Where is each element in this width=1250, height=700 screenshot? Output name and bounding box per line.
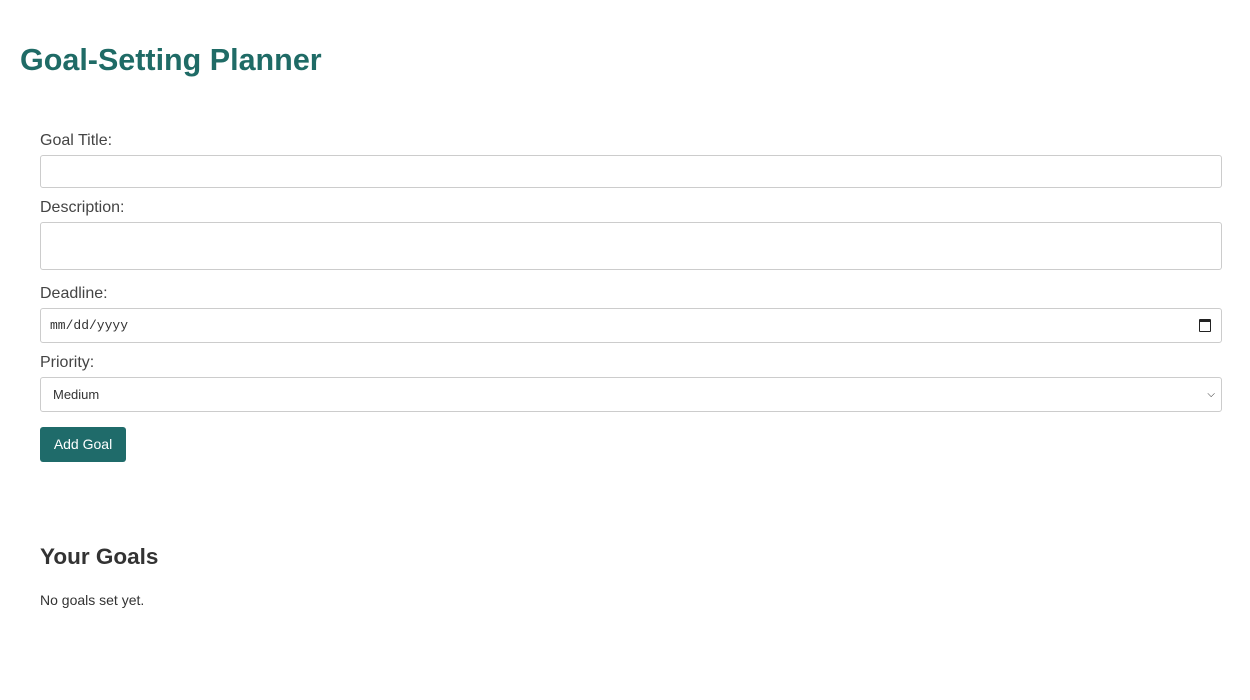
textarea: description bbox=[40, 222, 1222, 270]
title: Goal-Setting Planner bbox=[20, 43, 322, 77]
select: priority bbox=[40, 377, 1222, 412]
label: description: Description: bbox=[40, 199, 124, 216]
button: add goal: Add Goal bbox=[54, 436, 112, 452]
input: deadline date bbox=[40, 308, 1222, 343]
input: goal title bbox=[40, 155, 1222, 188]
label: goal title: Goal Title: bbox=[40, 132, 112, 149]
label: deadline: Deadline: bbox=[40, 285, 108, 302]
select: priority: ⌵ bbox=[1207, 389, 1215, 400]
heading: your goals: Your Goals bbox=[40, 544, 158, 569]
select: priority: Medium bbox=[53, 387, 99, 402]
text: empty state: No goals set yet. bbox=[40, 592, 144, 608]
input: deadline date: mm/dd/yyyy bbox=[50, 318, 128, 333]
button: add goal bbox=[40, 427, 126, 462]
label: priority: Priority: bbox=[40, 354, 94, 371]
form panel bbox=[40, 130, 1222, 464]
